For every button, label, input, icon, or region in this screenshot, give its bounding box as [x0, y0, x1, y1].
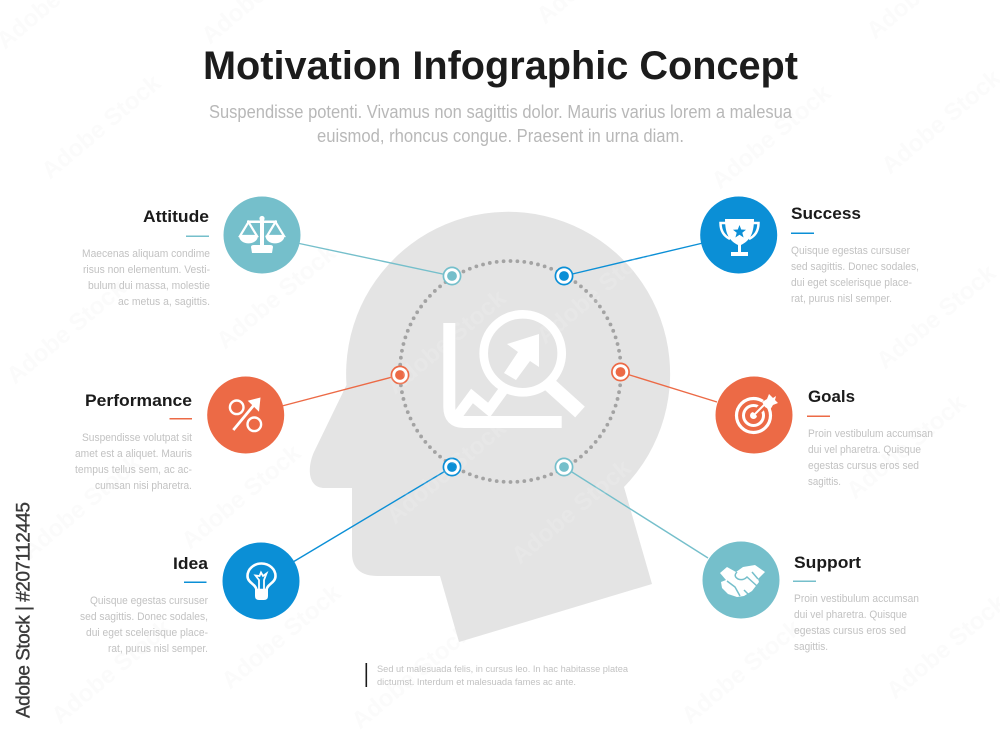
subtitle: euismod, rhoncus congue. Praesent in urna diam. [317, 126, 684, 146]
subtitle: Suspendisse potenti. Vivamus non sagittis dolor. Mauris varius lorem a malesua [209, 102, 793, 122]
node: goals [612, 363, 629, 381]
block: goals: dui vel pharetra. Quisque [808, 444, 921, 456]
block: support: Support [794, 553, 861, 572]
node: success [555, 267, 573, 285]
title: Motivation Infographic Concept [203, 44, 798, 88]
connector: idea [293, 467, 452, 562]
icon: scales [224, 196, 300, 274]
connector: performance [282, 375, 400, 406]
block: support: dui vel pharetra. Quisque [794, 609, 907, 621]
block: goals: Goals [808, 387, 855, 406]
watermark overlay: Adobe Stock [507, 454, 637, 570]
block: attitude: Maecenas aliquam condime [82, 248, 210, 260]
block: performance [75, 391, 192, 492]
block: idea: rat, purus nisl semper. [108, 643, 208, 655]
watermark background: Adobe Stock [217, 579, 347, 695]
block: attitude: Attitude [143, 207, 209, 226]
block: attitude: bulum dui massa, molestie [88, 280, 210, 292]
block: idea: Idea [173, 554, 209, 573]
block: performance: Suspendisse volutpat sit [82, 432, 192, 444]
block: support: egestas cursus eros sed [794, 625, 906, 637]
block: goals: Proin vestibulum accumsan [808, 428, 933, 440]
watermark background: Adobe Stock [47, 614, 177, 730]
footnote: dictumst. Interdum et malesuada fames ac ante. [377, 677, 576, 687]
block: idea [80, 554, 209, 655]
watermark overlay: Adobe Stock [532, 234, 662, 350]
block: attitude: risus non elementum. Vesti- [83, 264, 210, 276]
watermark background: Adobe Stock [842, 389, 972, 505]
icon: trophy [700, 196, 777, 274]
block: goals: sagittis. [808, 476, 841, 488]
stock id label: Adobe Stock | #207112445 [14, 502, 34, 718]
block: success: sed sagittis. Donec sodales, [791, 261, 919, 273]
watermark background: Adobe Stock [17, 449, 147, 565]
block: success: dui eget scelerisque place- [791, 277, 912, 289]
watermark background: Adobe Stock [2, 274, 132, 390]
block: success: Quisque egestas cursuser [791, 245, 910, 257]
connector: support [564, 467, 708, 558]
watermark overlay: Adobe Stock [382, 414, 512, 530]
node: performance [391, 366, 409, 384]
block: idea: sed sagittis. Donec sodales, [80, 611, 208, 623]
icon: percent arrow [207, 376, 284, 454]
block: success: Success [791, 204, 861, 223]
watermark background: Adobe Stock [707, 79, 837, 195]
watermark background: Adobe Stock [37, 69, 167, 185]
connector: goals [620, 372, 717, 402]
watermark background: Adobe Stock [177, 439, 307, 555]
watermark overlay: Adobe Stock [382, 284, 512, 400]
block: goals [807, 387, 933, 488]
dotted circle [400, 261, 621, 482]
head silhouette [310, 212, 670, 642]
icon: handshake [702, 542, 780, 618]
node: attitude [443, 267, 461, 285]
block: support [793, 553, 919, 653]
icon: target [716, 376, 792, 454]
block: performance: Performance [85, 391, 192, 410]
watermark overlay [382, 234, 662, 570]
footnote [366, 663, 628, 687]
block: performance: tempus tellus sem, ac ac- [75, 464, 192, 476]
block: goals: egestas cursus eros sed [808, 460, 919, 472]
footnote: Sed ut malesuada felis, in cursus leo. In hac habitasse platea [377, 664, 628, 674]
central icon: chart with magnifier [449, 314, 580, 422]
block: attitude: ac metus a, sagittis. [118, 296, 210, 308]
block: support: sagittis. [794, 641, 828, 653]
block: success [791, 204, 919, 305]
watermark background: Adobe Stock [677, 614, 807, 730]
block: attitude [82, 207, 210, 308]
connector: success [564, 243, 703, 276]
icon: lightbulb [222, 542, 300, 620]
block: support: Proin vestibulum accumsan [794, 593, 919, 605]
node: support [555, 458, 573, 476]
node: idea [443, 458, 461, 476]
block: success: rat, purus nisl semper. [791, 293, 892, 305]
watermark background: Adobe Stock [872, 259, 1000, 375]
block: idea: dui eget scelerisque place- [86, 627, 208, 639]
connector: attitude [297, 243, 452, 276]
watermark background: Adobe Stock [347, 619, 477, 733]
subtitle [209, 102, 793, 146]
watermark background: Adobe Stock [212, 239, 342, 355]
block: performance: amet est a aliquet. Mauris [75, 448, 192, 460]
block: performance: cumsan nisi pharetra. [95, 480, 192, 492]
block: idea: Quisque egestas cursuser [90, 595, 208, 607]
